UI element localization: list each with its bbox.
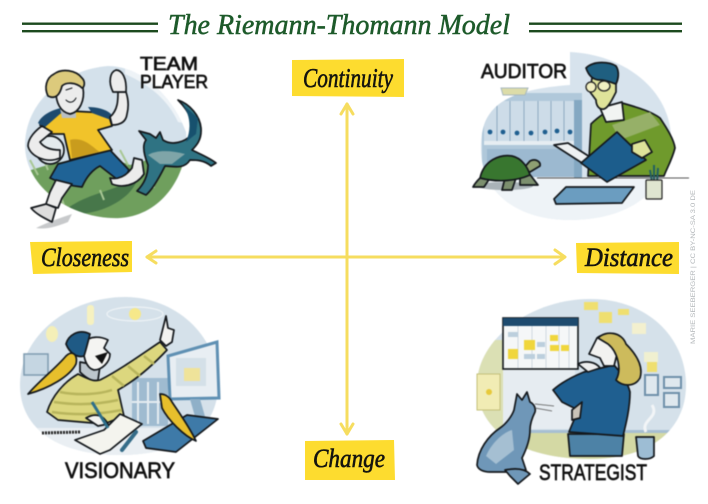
steam — [645, 405, 654, 432]
open book — [554, 132, 646, 182]
hair — [586, 62, 618, 84]
head — [590, 72, 616, 109]
bird on book — [160, 394, 196, 441]
glasses — [586, 81, 610, 92]
scene background — [24, 66, 187, 219]
mug — [636, 437, 654, 459]
title rules right — [529, 22, 682, 32]
shirt shadow — [70, 139, 100, 158]
neck and collar — [600, 102, 624, 122]
sweater — [588, 103, 675, 176]
credit line: MARIE SEEBERGER | CC BY-NC-SA 3.0 DE — [690, 190, 697, 344]
collar hand — [578, 362, 600, 372]
label: Closeness: Closeness — [41, 243, 129, 272]
title text: The Riemann-Thomann Model — [168, 10, 510, 41]
left frame — [24, 354, 48, 375]
foot shadow — [36, 214, 72, 229]
hand — [632, 140, 652, 158]
mouth — [95, 352, 108, 364]
shelf — [482, 92, 582, 167]
boot — [31, 204, 56, 222]
title — [22, 10, 682, 41]
writing hand and pen — [86, 402, 108, 428]
label: Continuity — [292, 59, 404, 97]
head — [589, 335, 618, 366]
sticky notes — [584, 302, 658, 372]
book — [143, 415, 218, 452]
neck — [80, 362, 100, 381]
closed book — [554, 187, 634, 204]
turtle — [473, 156, 540, 190]
dog — [137, 100, 216, 195]
shirt — [40, 111, 112, 160]
label: Continuity: Continuity — [303, 63, 393, 93]
bird on shoulder — [28, 353, 76, 394]
skirt — [568, 434, 624, 456]
legs — [46, 180, 72, 208]
notebook spiral — [42, 432, 80, 433]
cat — [477, 392, 554, 484]
hair — [66, 332, 90, 356]
sweater — [47, 342, 167, 424]
auditor label: AUDITOR — [481, 61, 567, 83]
illustration: team player — [20, 54, 216, 229]
hair — [46, 71, 84, 97]
team player label: TEAM — [140, 54, 198, 74]
illustration: visionary — [15, 295, 220, 483]
sweater stripes — [52, 356, 154, 414]
illustration: auditor — [473, 50, 690, 225]
hair — [598, 333, 641, 385]
axis arrows — [147, 104, 565, 434]
illustration: strategist — [475, 297, 688, 485]
label: Distance: Distance — [584, 243, 673, 272]
sweater highlight — [612, 112, 660, 140]
waving arm — [110, 92, 128, 125]
light bulb — [46, 326, 58, 342]
arm holding ball — [28, 126, 60, 160]
planets — [87, 305, 163, 325]
desk paper — [75, 414, 142, 454]
scene background — [15, 295, 220, 460]
wall calendar — [477, 374, 500, 410]
label: Change: Change — [313, 444, 385, 473]
football — [36, 136, 64, 164]
shorts — [50, 150, 129, 187]
scene background — [475, 297, 688, 462]
team player label — [140, 54, 208, 92]
hand on hip — [572, 402, 582, 420]
table line — [537, 177, 689, 179]
head — [83, 337, 110, 370]
wall frames — [645, 375, 681, 407]
visionary label: VISIONARY — [65, 458, 175, 483]
jacket — [553, 365, 630, 436]
smile — [66, 88, 76, 102]
scene background — [480, 52, 671, 220]
raised hand — [160, 316, 174, 346]
head — [56, 80, 83, 114]
binder dots — [488, 129, 572, 135]
shelf-top box — [501, 88, 528, 95]
monitor — [168, 342, 219, 420]
neck — [60, 108, 76, 118]
pen glass — [646, 165, 662, 199]
pen on desk — [122, 432, 136, 450]
shoulder stripes — [38, 107, 111, 128]
hand — [110, 70, 126, 92]
title rules left — [22, 22, 158, 32]
label: Change — [305, 440, 395, 480]
team player label: PLAYER — [140, 72, 208, 92]
planning board — [503, 318, 578, 369]
strategist label: STRATEGIST — [539, 460, 647, 485]
